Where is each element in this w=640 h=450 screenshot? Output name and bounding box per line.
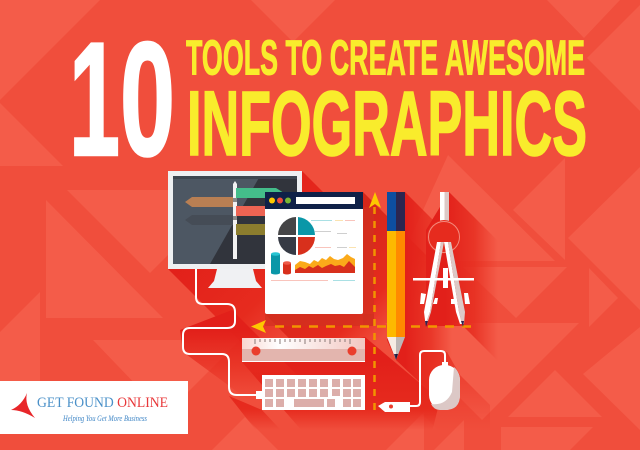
arrow head up: [369, 192, 381, 208]
cylinder bars: [271, 252, 291, 274]
monitor: [168, 171, 302, 288]
pie chart: [278, 217, 315, 255]
monitor frame: [168, 171, 302, 269]
title: 1: [69, 9, 120, 190]
logo panel: [0, 381, 188, 434]
signpost pole: [233, 181, 237, 259]
arrow head left: [251, 320, 266, 333]
area chart: [295, 254, 355, 273]
dashed arrows: [251, 192, 476, 412]
logo mark: [11, 393, 35, 418]
compass: [413, 192, 474, 327]
big number 10: [69, 9, 175, 190]
logo tagline: Helping You Get More Business: [62, 414, 147, 423]
legend lines: [271, 220, 356, 280]
monitor stand: [208, 269, 262, 288]
dark panel inside dashes: [363, 207, 374, 326]
title: [69, 9, 587, 190]
keyboard: [256, 375, 365, 410]
title: 0: [120, 9, 175, 190]
pencil: [387, 192, 405, 360]
browser window chart: [265, 192, 363, 314]
monitor cable: [183, 269, 258, 395]
ruler: [242, 338, 365, 362]
browser header: [265, 192, 363, 209]
logo wordmark: GET FOUND ONLINE: [37, 395, 168, 411]
sign arrows: [236, 188, 284, 198]
long shadows: [168, 171, 505, 440]
monitor screen: [173, 176, 297, 264]
mouse with cable and plug: [378, 351, 460, 412]
